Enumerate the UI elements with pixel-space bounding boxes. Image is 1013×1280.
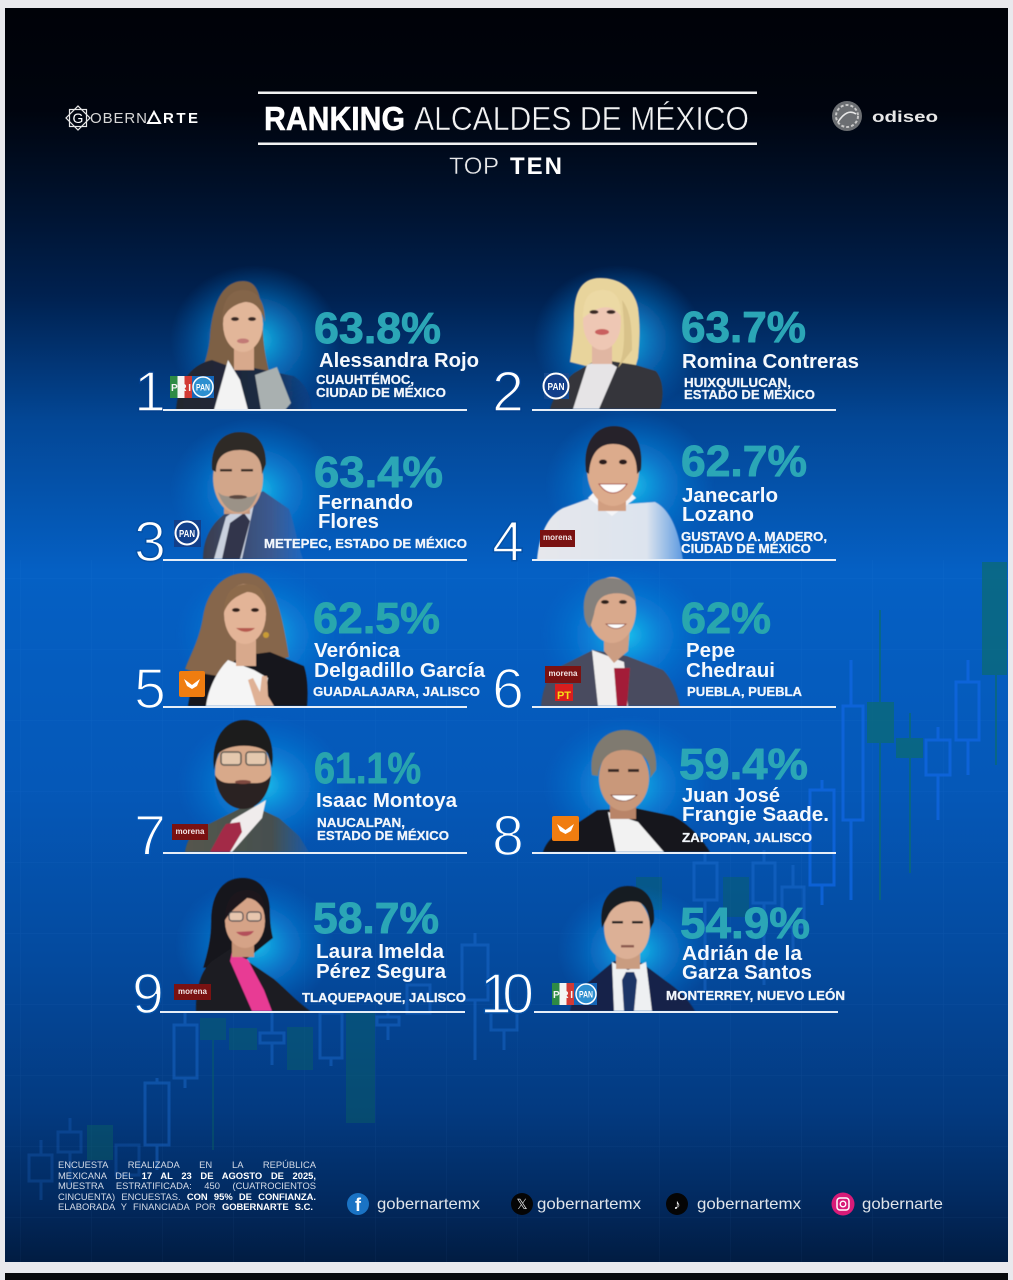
party logo PAN: PAN <box>179 529 195 540</box>
percentage 63.8%: 63.8% <box>314 304 441 353</box>
name: Romina Contreras <box>682 351 859 373</box>
header logo: Gobernarte: OBERN <box>90 110 147 127</box>
portrait 2 <box>533 265 703 415</box>
percentage 59.4%: 59.4% <box>679 740 808 789</box>
survey methodology note: ENCUESTA REALIZADA EN LA REPÚBLICA <box>58 1159 316 1170</box>
location: GUSTAVO A. MADERO, <box>681 529 827 544</box>
party logo morena <box>172 824 208 840</box>
name: Isaac Montoya <box>316 790 458 812</box>
baseline <box>163 706 467 708</box>
row 7: Isaac Montoya <box>134 715 467 868</box>
social: X: gobernartemx <box>537 1196 641 1213</box>
percentage 58.7%: 58.7% <box>313 894 439 943</box>
name: Juan José <box>682 785 780 807</box>
location: CUAUHTÉMOC, <box>316 372 414 387</box>
location: CIUDAD DE MÉXICO <box>316 385 446 400</box>
party logos PRI PAN <box>170 376 214 398</box>
party logo PAN <box>174 520 201 547</box>
header logo: Gobernarte: G <box>73 110 83 126</box>
percentage 62%: 62% <box>681 594 771 643</box>
name: Alessandra Rojo <box>319 350 479 372</box>
social: TikTok: ♪ <box>674 1196 680 1212</box>
survey methodology note: ELABORADA Y FINANCIADA POR GOBERNARTE S.C. <box>58 1201 313 1212</box>
portrait 5 <box>175 563 345 707</box>
name: Janecarlo <box>682 485 778 507</box>
party logo PAN: PAN <box>548 382 564 393</box>
rank number 9: 9 <box>132 962 164 1026</box>
rank number 8: 8 <box>492 804 524 868</box>
party logo morena: morena <box>543 533 572 542</box>
title <box>258 92 757 145</box>
baseline <box>532 852 836 854</box>
location <box>316 372 446 400</box>
social: Instagram <box>832 1192 943 1216</box>
name: Pepe <box>686 640 735 662</box>
location: METEPEC, ESTADO DE MÉXICO <box>264 536 467 551</box>
portrait 7 <box>177 715 347 855</box>
bottom black strip <box>5 1273 1008 1280</box>
party logos morena PT <box>545 666 581 702</box>
location: NAUCALPAN, <box>317 815 405 830</box>
party logos PRI PAN: PRI <box>553 990 573 1001</box>
party logos morena PT: PT <box>557 690 571 702</box>
rank number 3: 3 <box>134 510 166 574</box>
party logos PRI PAN: PRI <box>171 383 191 394</box>
rank number 1: 1 <box>134 360 166 424</box>
location: ESTADO DE MÉXICO <box>684 387 815 402</box>
subtitle: TOP <box>449 153 499 180</box>
row 5: Verónica Delgadillo García <box>134 563 486 721</box>
survey methodology note <box>58 1159 316 1212</box>
name <box>682 785 829 826</box>
social: Facebook: gobernartemx <box>377 1196 480 1213</box>
location <box>684 375 815 402</box>
location: ZAPOPAN, JALISCO <box>682 830 812 845</box>
survey methodology note: MEXICANA DEL 17 AL 23 DE AGOSTO DE 2025, <box>58 1170 316 1180</box>
percentage 62.5%: 62.5% <box>313 594 440 643</box>
location <box>681 529 827 556</box>
location: TLAQUEPAQUE, JALISCO <box>302 990 466 1005</box>
party logo morena <box>174 984 211 1000</box>
rank number 10: 10 <box>480 962 534 1026</box>
name: Garza Santos <box>682 962 812 984</box>
party logo morena <box>540 530 575 547</box>
portrait 3 <box>170 418 340 562</box>
rank number 4: 4 <box>492 510 524 574</box>
location: MONTERREY, NUEVO LEÓN <box>666 988 845 1003</box>
name: Laura Imelda <box>316 941 445 963</box>
location: HUIXQUILUCAN, <box>684 375 791 390</box>
location: ESTADO DE MÉXICO <box>317 828 449 843</box>
portrait 10 <box>557 885 713 1015</box>
portrait 1 <box>170 265 340 415</box>
row 3: Fernando Flores <box>134 418 467 574</box>
name: Verónica <box>314 640 401 662</box>
subtitle <box>449 153 562 180</box>
party logo Movimiento Ciudadano <box>552 816 579 841</box>
name <box>314 640 486 682</box>
name: Delgadillo García <box>314 660 486 682</box>
location: PUEBLA, PUEBLA <box>687 684 803 699</box>
header logo: Odiseo: odiseo <box>872 109 938 126</box>
name <box>682 943 812 984</box>
header logo: Gobernarte <box>66 106 198 130</box>
row 8: Juan José Frangie Saade <box>492 715 836 868</box>
rank number 2: 2 <box>492 360 524 424</box>
name <box>316 941 447 983</box>
survey methodology note: CINCUENTA) ENCUESTAS. CON 95% DE CONFIANZA. <box>58 1190 316 1202</box>
row 6: Pepe Chedraui <box>492 563 836 721</box>
percentage 54.9%: 54.9% <box>680 899 810 948</box>
location: CIUDAD DE MÉXICO <box>681 541 811 556</box>
social: X <box>511 1193 641 1215</box>
party logos PRI PAN: PAN <box>196 382 210 392</box>
title: RANKING <box>264 100 405 137</box>
name <box>682 485 778 526</box>
party logo PAN <box>544 373 569 399</box>
subtitle: TEN <box>510 153 562 180</box>
party logo Movimiento Ciudadano <box>179 671 205 697</box>
baseline <box>163 559 467 561</box>
row 4: Janecarlo Lozano <box>492 410 836 574</box>
baseline <box>532 559 836 561</box>
social: Facebook <box>347 1193 480 1215</box>
name: Adrián de la <box>682 943 803 965</box>
portrait 4 <box>537 410 715 560</box>
name <box>686 640 775 682</box>
name: Flores <box>318 511 379 533</box>
portrait 8 <box>543 715 713 855</box>
baseline <box>160 1011 465 1013</box>
baseline <box>532 706 836 708</box>
percentage 62.7%: 62.7% <box>681 437 807 486</box>
row 1: Alessandra Rojo <box>134 265 479 424</box>
name: Frangie Saade. <box>682 804 829 826</box>
survey methodology note: MUESTRA ESTRATIFICADA: 450 (CUATROCIENTOS <box>58 1180 316 1191</box>
percentage 63.4%: 63.4% <box>314 448 443 497</box>
social: TikTok: gobernartemx <box>697 1196 801 1213</box>
party logos PRI PAN <box>552 983 597 1005</box>
rank number 5: 5 <box>134 657 166 721</box>
social: X: 𝕏 <box>516 1196 528 1212</box>
social: TikTok <box>666 1193 801 1215</box>
rank number 7: 7 <box>134 804 166 868</box>
name: Chedraui <box>686 660 775 682</box>
name: Lozano <box>682 504 754 526</box>
percentage 61.1%: 61.1% <box>314 744 421 793</box>
social: Instagram: gobernarte <box>862 1196 943 1213</box>
row 2: Romina Contreras <box>492 265 859 424</box>
name: Fernando <box>318 492 413 514</box>
name: Pérez Segura <box>316 961 447 983</box>
percentage 63.7%: 63.7% <box>681 303 806 352</box>
baseline <box>534 1011 838 1013</box>
baseline <box>163 409 467 411</box>
baseline <box>163 852 467 854</box>
header logo: Odiseo <box>832 101 938 131</box>
location: GUADALAJARA, JALISCO <box>313 684 480 699</box>
party logo morena: morena <box>178 987 207 996</box>
baseline <box>532 409 836 411</box>
social: Facebook: f <box>355 1195 362 1215</box>
title: ALCALDES DE MÉXICO <box>414 100 749 137</box>
portrait 6 <box>540 563 710 707</box>
candlestick chart background <box>29 562 1007 1200</box>
portrait 9 <box>175 877 335 1013</box>
party logo morena: morena <box>176 827 205 836</box>
party logos PRI PAN: PAN <box>579 990 593 1000</box>
name <box>318 492 413 533</box>
header logo: Gobernarte: RTE <box>163 110 198 127</box>
rank number 6: 6 <box>492 657 524 721</box>
party logos morena PT: morena <box>549 669 578 678</box>
row 10: Adrián de la Garza Santos <box>480 885 845 1026</box>
location <box>317 815 449 843</box>
row 9: Laura Imelda Pérez Segura <box>132 877 466 1026</box>
